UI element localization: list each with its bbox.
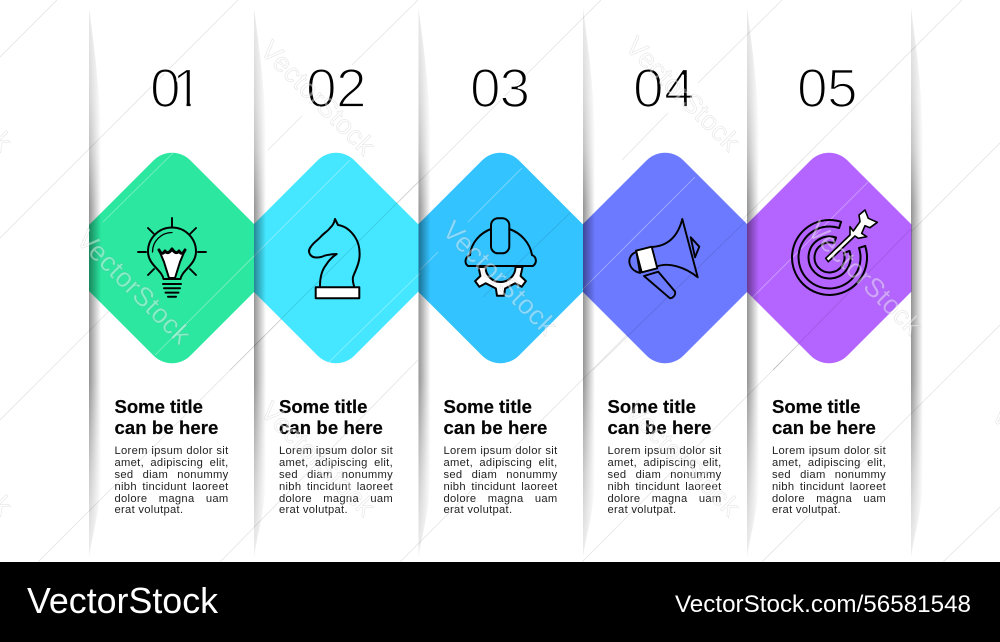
footer bar <box>0 562 1000 642</box>
text block: column 1: amet, adipiscing elit, <box>114 457 228 469</box>
panel: diamond 1 green <box>89 152 254 364</box>
text block: column 4: erat volutpat. <box>608 504 676 516</box>
fold shadows between columns <box>89 8 923 557</box>
text block: column 3: Some title <box>444 396 532 417</box>
footer bar: VectorStock <box>27 580 219 621</box>
text block: column 4: Lorem ipsum dolor sit <box>608 445 722 457</box>
watermark text overlay: VectorStock <box>255 35 381 161</box>
text block: column 3: erat volutpat. <box>444 504 512 516</box>
icon: light bulb <box>138 218 206 297</box>
panel: diamond 3 blue <box>418 152 583 364</box>
text block: column 2: can be here <box>279 417 383 438</box>
watermark text overlay: VectorStock <box>71 224 197 350</box>
text block: column 4: Some title <box>608 396 696 417</box>
text block: column 5: sed diam nonummy <box>772 469 886 481</box>
text block: column 4: can be here <box>608 417 711 438</box>
text block: column 1: dolore magna uam <box>114 493 228 505</box>
icon: megaphone <box>629 219 699 298</box>
text block: column 1: sed diam nonummy <box>114 469 228 481</box>
text block: column 4: nibh tincidunt laoreet <box>608 481 722 493</box>
text block: column 5: erat volutpat. <box>772 504 841 516</box>
text block: column 5: Lorem ipsum dolor sit <box>772 445 886 457</box>
text block: column 2: erat volutpat. <box>279 504 348 516</box>
text block: column 4: sed diam nonummy <box>608 469 722 481</box>
icon: hard hat with gear <box>466 218 536 296</box>
text block: column 1: erat volutpat. <box>114 504 183 516</box>
text block: column 1: Lorem ipsum dolor sit <box>114 445 228 457</box>
text block: column 3: nibh tincidunt laoreet <box>444 481 558 493</box>
text block: column 5: nibh tincidunt laoreet <box>772 481 886 493</box>
text block: column 2 <box>279 396 393 516</box>
text block: column 5: Some title <box>772 396 860 417</box>
number 05: 05 <box>797 57 858 119</box>
watermark text overlay: VectorStock <box>437 215 563 341</box>
text block: column 5: dolore magna uam <box>772 493 886 505</box>
number 04: 04 <box>633 57 695 119</box>
text block: column 5 <box>772 396 886 516</box>
text block: column 4: dolore magna uam <box>608 493 722 505</box>
text block: column 3: dolore magna uam <box>444 493 558 505</box>
text block: column 2: amet, adipiscing elit, <box>279 457 393 469</box>
text block: column 4: amet, adipiscing elit, <box>608 457 722 469</box>
icon: chess knight <box>309 219 360 298</box>
text block: column 2: Some title <box>279 396 367 417</box>
number 02: 02 <box>306 57 367 119</box>
text block: column 2: dolore magna uam <box>279 493 393 505</box>
number 03: 03 <box>470 57 530 119</box>
text block: column 3: amet, adipiscing elit, <box>444 457 558 469</box>
watermark hairlines over diamonds <box>103 153 911 370</box>
watermark text overlay: VectorStock <box>255 396 381 522</box>
text block: column 4 <box>608 396 722 516</box>
panel: diamond 4 indigo <box>583 152 747 364</box>
icon: target with arrow <box>792 210 877 295</box>
text block: column 5: amet, adipiscing elit, <box>772 457 886 469</box>
text block: column 2: sed diam nonummy <box>279 469 393 481</box>
text block: column 1 <box>114 396 228 516</box>
text block: column 3 <box>444 396 558 516</box>
panel: diamond 2 cyan <box>254 152 418 364</box>
watermark text overlay: VectorStock <box>802 215 928 341</box>
text block: column 2: nibh tincidunt laoreet <box>279 481 393 493</box>
watermark text overlay: VectorStock <box>620 396 746 522</box>
text block: column 1: can be here <box>114 417 218 438</box>
number 01: 01 <box>150 57 203 119</box>
text block: column 3: sed diam nonummy <box>444 469 558 481</box>
text block: column 5: can be here <box>772 417 876 438</box>
text block: column 1: Some title <box>114 396 203 417</box>
panel: diamond 5 purple <box>747 152 912 364</box>
text block: column 3: can be here <box>444 417 547 438</box>
footer bar: VectorStock.com/56581548 <box>675 591 971 618</box>
watermark text overlay: VectorStock <box>620 31 746 157</box>
text block: column 2: Lorem ipsum dolor sit <box>279 445 393 457</box>
text block: column 3: Lorem ipsum dolor sit <box>444 445 558 457</box>
text block: column 1: nibh tincidunt laoreet <box>114 481 228 493</box>
